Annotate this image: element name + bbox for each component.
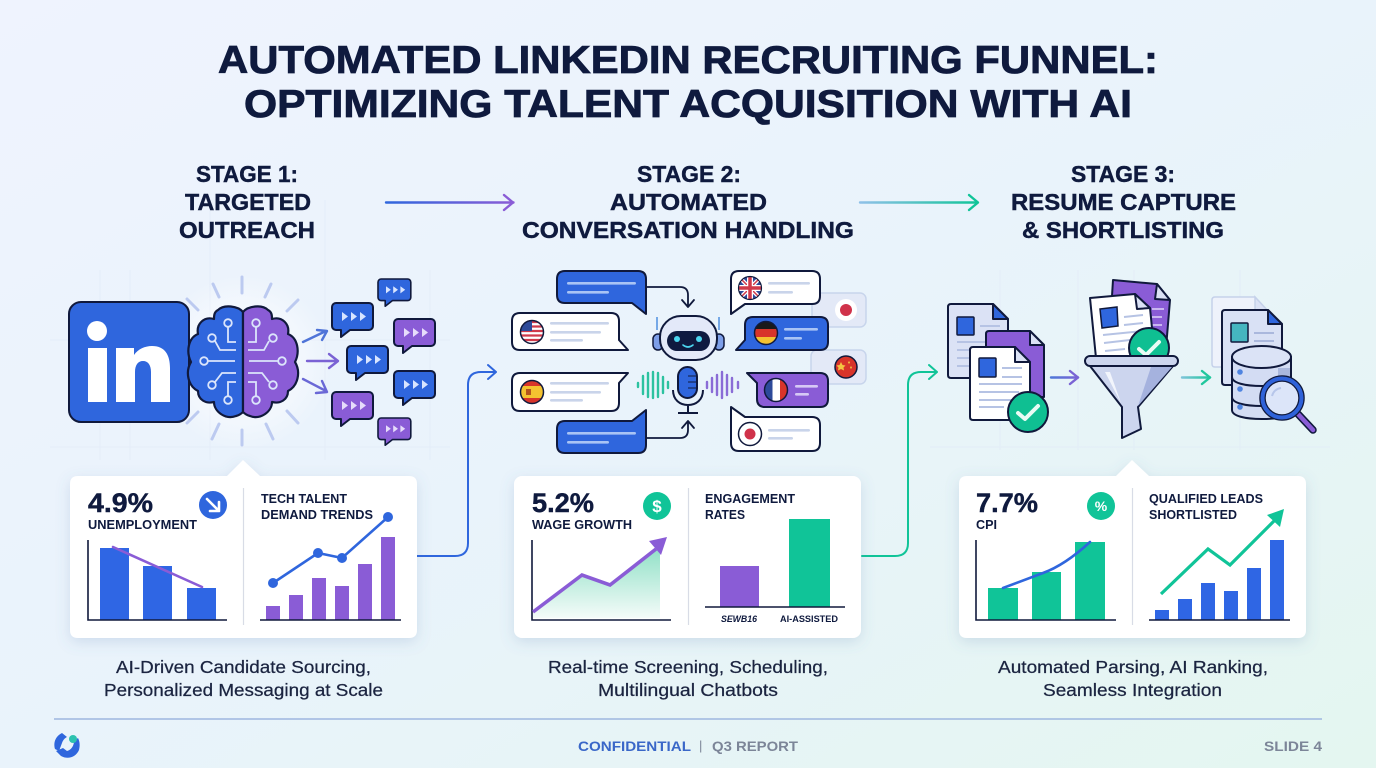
heading: engagement rates: ENGAGEMENT — [705, 491, 795, 506]
stat: 7.7% CPI: 7.7% — [976, 488, 1038, 518]
stat: 5.2% wage growth: WAGE GROWTH — [532, 517, 632, 532]
title: AUTOMATED LINKEDIN RECRUITING FUNNEL: — [218, 39, 1158, 82]
icon: UK flag bubble — [731, 271, 820, 314]
bar chart: engagement rates — [705, 519, 845, 625]
icon: purple sound wave — [707, 372, 738, 398]
heading: stage 1 — [179, 161, 315, 243]
panel: stage 3 metrics card — [959, 460, 1306, 638]
heading: stage 2: STAGE 2: — [637, 161, 741, 187]
panel: stage 1 illustration — [69, 274, 435, 450]
heading: stage 1: STAGE 1: — [196, 161, 298, 187]
title — [218, 39, 1158, 126]
stat: 4.9% unemployment: UNEMPLOYMENT — [88, 517, 197, 532]
panel: stage 2 metrics card — [514, 476, 861, 638]
icon: footer logo — [54, 733, 80, 758]
heading: stage 3: STAGE 3: — [1071, 161, 1175, 187]
stat: 4.9% unemployment: 4.9% — [88, 488, 153, 518]
heading: engagement rates: RATES — [705, 507, 745, 522]
bar chart: engagement rates: SEWB16 — [721, 614, 758, 625]
icon: French flag bubble — [747, 373, 828, 407]
icon: message bubbles — [332, 279, 435, 445]
arrow: stage 2 to stage 3 — [860, 195, 978, 210]
heading: tech talent demand trends — [261, 491, 373, 522]
icon: US flag bubble — [512, 313, 628, 350]
heading: tech talent demand trends: TECH TALENT — [261, 491, 347, 506]
combo chart: qualified leads — [1149, 509, 1290, 620]
icon: faded language cards — [811, 293, 866, 384]
stat: 5.2% wage growth — [532, 488, 632, 532]
heading: stage 2: AUTOMATED — [610, 189, 767, 215]
heading: tech talent demand trends: DEMAND TRENDS — [261, 507, 373, 522]
heading: stage 1: TARGETED — [185, 189, 311, 215]
icon: outreach arrows — [303, 330, 338, 393]
icon: trend down badge — [199, 491, 227, 519]
icon: dollar badge — [643, 492, 671, 520]
stat: 4.9% unemployment — [88, 488, 197, 532]
icon: resume stack — [948, 304, 1048, 432]
arrow: funnel to database — [1182, 371, 1210, 384]
icon: percent badge — [1087, 492, 1115, 520]
icon: filter funnel — [1085, 280, 1178, 438]
heading: stage 1: OUTREACH — [179, 217, 315, 243]
arrow: stage 1 to stage 2 — [386, 195, 514, 210]
heading: stage 2 — [522, 161, 854, 243]
panel: stage 3 illustration — [948, 280, 1313, 438]
caption: stage 3: Seamless Integration — [1043, 680, 1222, 700]
caption: stage 1: Personalized Messaging at Scale — [104, 680, 383, 700]
bar chart: CPI — [976, 540, 1116, 620]
icon: German flag bubble — [736, 317, 828, 350]
icon: Spain flag bubble — [512, 373, 628, 411]
arrow: stage 1 card to stage 2 — [417, 365, 496, 556]
caption: stage 1 — [104, 657, 383, 700]
footer: confidential label — [578, 738, 798, 754]
icon: radiating rays — [187, 277, 298, 445]
icon: blue speech bubble top — [557, 271, 646, 314]
heading: stage 3: & SHORTLISTING — [1022, 217, 1224, 243]
caption: stage 3 — [998, 657, 1268, 700]
heading: stage 3 — [1011, 161, 1236, 243]
heading: qualified leads shortlisted: QUALIFIED LEADS — [1149, 491, 1263, 506]
area chart: wage growth — [532, 537, 671, 620]
footer: confidential label: CONFIDENTIAL — [578, 738, 691, 754]
icon: chatbot robot — [653, 316, 724, 360]
icon: AI brain — [188, 306, 298, 417]
heading: engagement rates — [705, 491, 795, 522]
caption: stage 3: Automated Parsing, AI Ranking, — [998, 657, 1268, 677]
stat: 7.7% CPI: CPI — [976, 517, 997, 532]
icon: dollar badge: $ — [652, 497, 662, 516]
icon: linkedin logo — [69, 302, 189, 422]
stat: 7.7% CPI — [976, 488, 1038, 532]
icon: teal sound wave — [638, 372, 668, 398]
panel: stage 2 illustration — [512, 271, 866, 453]
icon: arrow to microphone — [647, 421, 694, 438]
bar chart: engagement rates: AI-ASSISTED — [780, 614, 838, 625]
panel: stage 1 metrics card — [70, 460, 417, 638]
heading: stage 3: RESUME CAPTURE — [1011, 189, 1236, 215]
icon: microphone — [673, 367, 703, 413]
icon: Japan flag bubble — [731, 407, 820, 451]
combo chart: tech talent demand — [260, 512, 401, 620]
arrow: stage 2 card to stage 3 — [862, 365, 937, 556]
title: OPTIMIZING TALENT ACQUISITION WITH AI — [244, 83, 1132, 126]
icon: percent badge: % — [1095, 498, 1108, 514]
caption: stage 2 — [548, 657, 828, 700]
heading: qualified leads shortlisted — [1149, 491, 1263, 522]
footer: slide number: SLIDE 4 — [1264, 738, 1322, 754]
icon: arrow to robot — [647, 287, 694, 307]
caption: stage 1: AI-Driven Candidate Sourcing, — [116, 657, 371, 677]
stat: 5.2% wage growth: 5.2% — [532, 488, 594, 518]
footer: confidential label: | — [699, 738, 702, 753]
heading: stage 2: CONVERSATION HANDLING — [522, 217, 854, 243]
caption: stage 2: Real-time Screening, Scheduling, — [548, 657, 828, 677]
icon: blue speech bubble bottom — [557, 410, 646, 453]
footer: confidential label: Q3 REPORT — [712, 738, 798, 754]
caption: stage 2: Multilingual Chatbots — [598, 680, 778, 700]
heading: qualified leads shortlisted: SHORTLISTED — [1149, 507, 1237, 522]
icon: database and search — [1212, 297, 1313, 430]
bar chart: unemployment — [88, 540, 227, 620]
arrow: resumes to funnel — [1051, 371, 1078, 384]
